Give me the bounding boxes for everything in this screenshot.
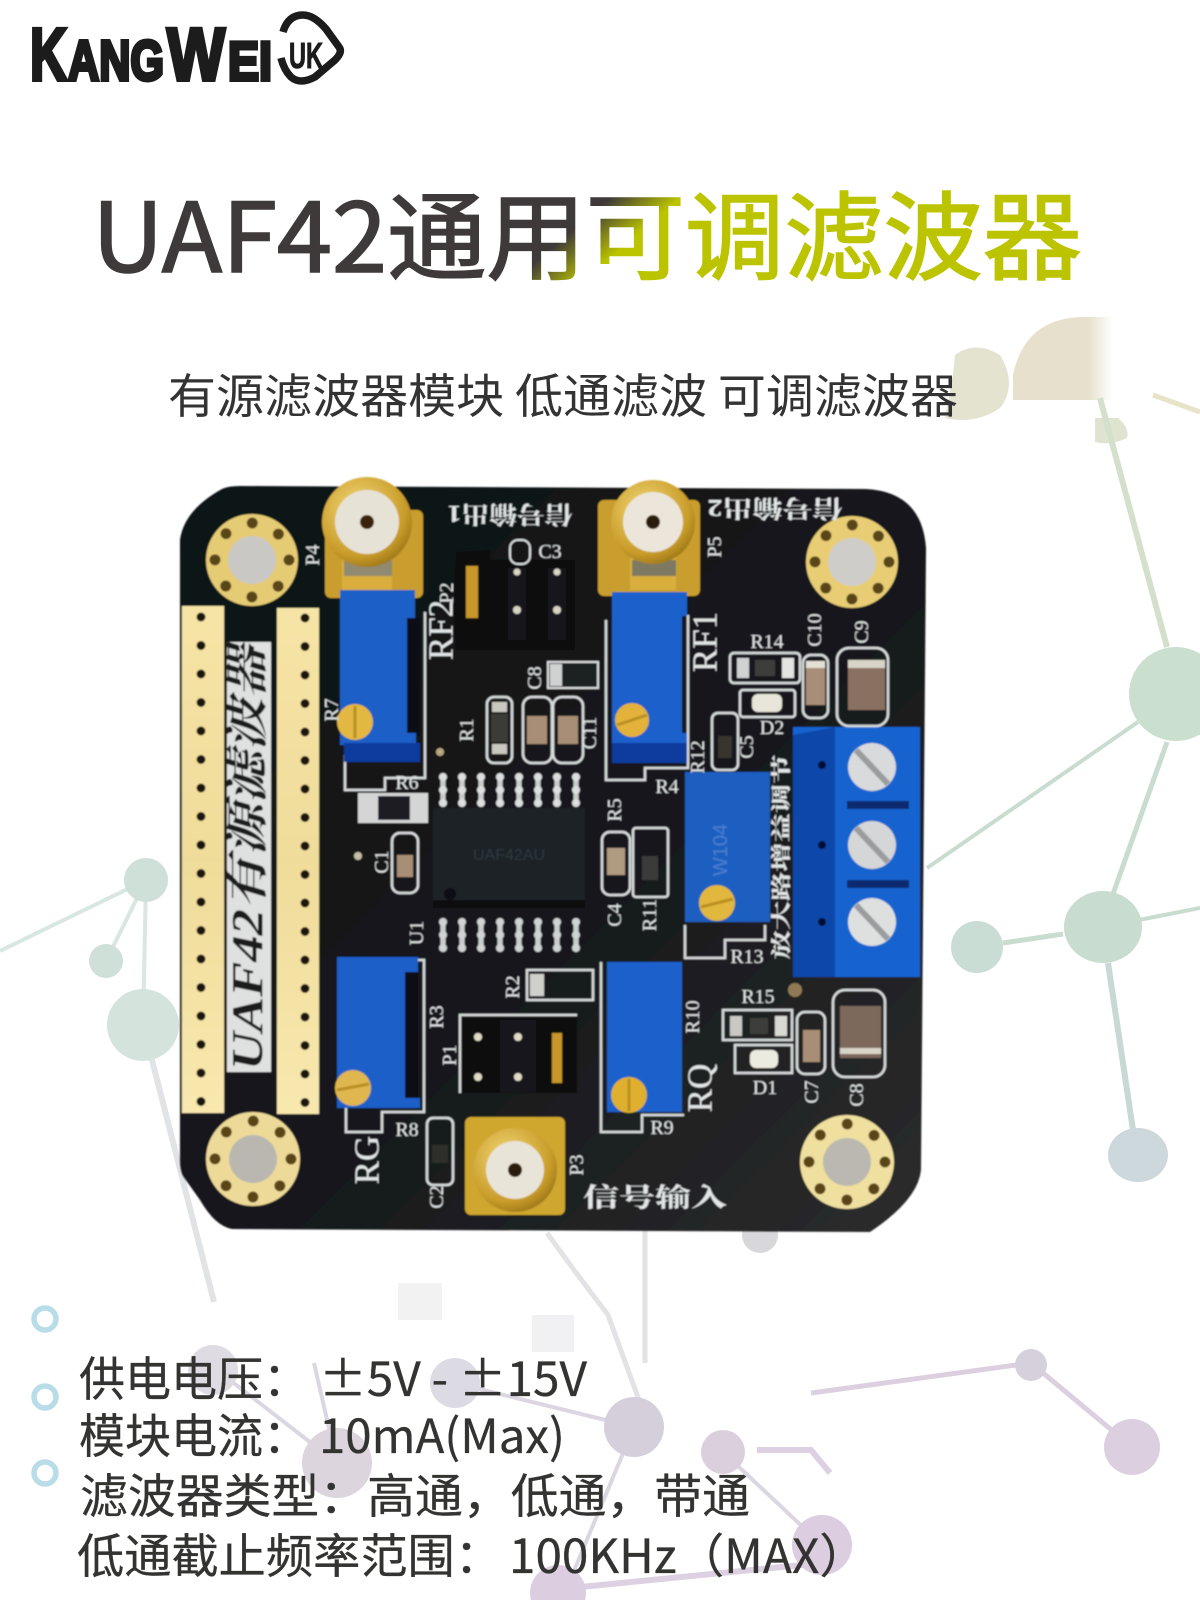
silkscreen labels: RF1 bbox=[686, 612, 724, 672]
trimmer W104 bbox=[685, 772, 770, 958]
silkscreen labels: R12 bbox=[687, 740, 709, 774]
logo: KANGWEI wordmark bbox=[30, 13, 272, 96]
silkscreen labels: P1 bbox=[439, 1044, 461, 1066]
background network: upper right green nodes bbox=[927, 317, 1200, 1182]
jumper header P1 bbox=[460, 1015, 577, 1093]
trimmer RF1 bbox=[606, 592, 688, 780]
spec: supply voltage: ±5V - ±15V bbox=[319, 1341, 588, 1410]
spec: module current bbox=[79, 1398, 565, 1467]
op-amp IC U1: UAF42AU bbox=[473, 847, 545, 864]
SMA connector P4 bbox=[322, 477, 423, 598]
specifications text bbox=[77, 1341, 867, 1587]
silkscreen labels: C3 bbox=[538, 541, 562, 563]
silkscreen labels: C7 bbox=[801, 1080, 823, 1104]
spec: cutoff frequency: 低通截止频率范围： bbox=[77, 1518, 502, 1587]
silkscreen labels: C8 bbox=[524, 666, 546, 690]
logo: UK emblem: UK bbox=[289, 35, 323, 76]
silkscreen labels: R15 bbox=[741, 986, 775, 1008]
trimmer W104: W104 bbox=[710, 824, 732, 876]
spec: supply voltage bbox=[79, 1341, 588, 1410]
silkscreen labels: U1 bbox=[406, 921, 428, 945]
silkscreen labels: R5 bbox=[604, 798, 626, 822]
spec: cutoff frequency: 100KHz（MAX） bbox=[509, 1518, 867, 1587]
silkscreen labels: RG bbox=[348, 1136, 386, 1184]
SMA connector P5 bbox=[598, 480, 700, 596]
silkscreen labels: R11 bbox=[639, 899, 661, 931]
silkscreen labels: C1 bbox=[371, 850, 393, 874]
PCB module photo bbox=[180, 477, 926, 1232]
gold prototyping strip left bbox=[182, 606, 224, 1113]
mounting hole top right bbox=[806, 516, 898, 608]
silkscreen labels: R8 bbox=[395, 1119, 419, 1141]
bullet rings bbox=[34, 1308, 56, 1484]
SMA connector P3 bbox=[465, 1117, 565, 1215]
spec: module current: 10mA(Max) bbox=[319, 1398, 565, 1467]
silkscreen labels: R13 bbox=[730, 946, 764, 968]
silkscreen labels: R2 bbox=[502, 975, 524, 999]
silkscreen labels: C4 bbox=[604, 903, 626, 927]
silkscreen labels: 信号输入 bbox=[583, 1184, 727, 1212]
gold prototyping strip right bbox=[277, 608, 319, 1114]
logo: KANGWEI wordmark: EI bbox=[228, 30, 272, 92]
spec: filter type: 滤波器类型：高通，低通，带通 bbox=[80, 1458, 750, 1527]
trimmer RQ bbox=[601, 962, 684, 1132]
SMD components bbox=[354, 540, 888, 1185]
logo: KANGWEI wordmark: W bbox=[167, 13, 225, 96]
silkscreen labels: R3 bbox=[426, 1005, 448, 1029]
trimmer RG bbox=[335, 957, 424, 1132]
mounting hole bottom left bbox=[206, 1112, 300, 1206]
op-amp IC U1 bbox=[433, 777, 585, 948]
mounting hole bottom right bbox=[800, 1115, 894, 1209]
silkscreen labels: C10 bbox=[804, 613, 826, 647]
silkscreen labels: RF2 bbox=[422, 600, 460, 660]
subtitle: 有源滤波器模块 低通滤波 可调滤波器 bbox=[168, 358, 958, 427]
spec: cutoff frequency bbox=[77, 1518, 867, 1587]
silkscreen labels: C11 bbox=[579, 717, 601, 749]
silkscreen labels: C9 bbox=[851, 620, 873, 644]
silkscreen labels: R14 bbox=[750, 631, 784, 653]
title: UAF42通用可调滤波器 bbox=[92, 161, 1082, 300]
module name label: UAF42有源滤波器 bbox=[223, 640, 272, 1070]
silkscreen labels: 信号输出2 bbox=[708, 494, 842, 521]
silkscreen labels: 放大路增益调节 bbox=[769, 754, 793, 960]
silkscreen labels: P5 bbox=[704, 536, 726, 558]
logo: UK emblem bbox=[281, 15, 340, 81]
silkscreen labels: P2 bbox=[436, 582, 458, 604]
logo: KANGWEI wordmark: K bbox=[30, 13, 67, 96]
spec: supply voltage: 供电电压： bbox=[79, 1341, 309, 1410]
screw terminal block bbox=[793, 727, 920, 977]
silkscreen labels: D1 bbox=[753, 1077, 777, 1099]
silkscreen labels: R1 bbox=[456, 718, 478, 742]
silkscreen labels: R6 bbox=[395, 772, 419, 794]
silkscreen labels: D2 bbox=[760, 717, 784, 739]
silkscreen labels: 信号输出1 bbox=[448, 500, 572, 527]
silkscreen labels: R7 bbox=[321, 698, 343, 722]
silkscreen labels: R10 bbox=[682, 1000, 704, 1034]
silkscreen labels: R9 bbox=[650, 1117, 674, 1139]
silkscreen labels: P3 bbox=[566, 1154, 588, 1176]
silkscreen labels: C2 bbox=[426, 1185, 448, 1209]
background network: bottom purple nodes bbox=[188, 1217, 1160, 1600]
board body bbox=[180, 486, 926, 1232]
silkscreen labels: RQ bbox=[680, 1064, 720, 1112]
silkscreen labels: R4 bbox=[655, 776, 679, 798]
jumper header P2 bbox=[454, 550, 575, 650]
silkscreen labels bbox=[302, 494, 873, 1212]
mounting hole top left bbox=[206, 514, 298, 606]
spec: module current: 模块电流： bbox=[79, 1398, 309, 1467]
logo: KANGWEI wordmark: ANG bbox=[68, 29, 164, 93]
background network: left nodes bbox=[0, 858, 214, 1302]
silkscreen labels: C5 bbox=[736, 735, 758, 759]
silkscreen labels: C8 bbox=[846, 1083, 868, 1107]
silkscreen labels: P4 bbox=[302, 544, 324, 566]
trimmer RF2 bbox=[337, 590, 425, 790]
